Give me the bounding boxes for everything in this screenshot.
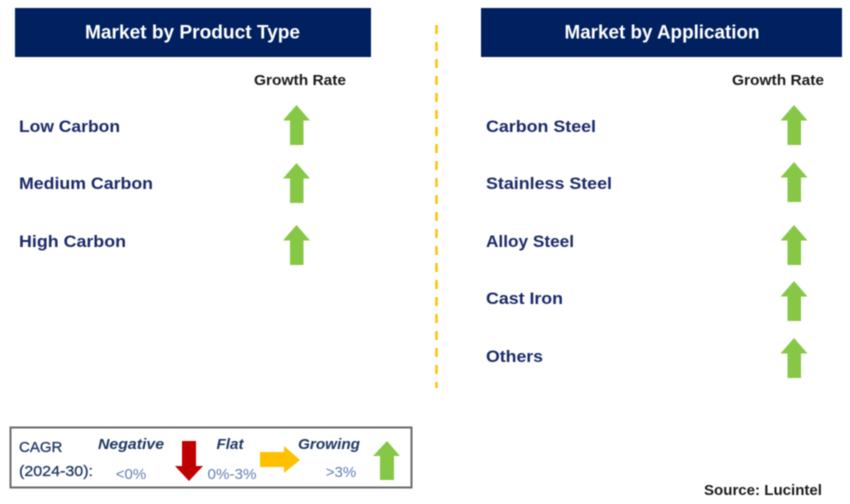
row: carbon steel: Carbon Steel bbox=[486, 117, 596, 136]
row: alloy steel bbox=[486, 225, 808, 265]
legend: growing: >3% bbox=[326, 464, 356, 481]
divider bbox=[435, 25, 438, 388]
row: high carbon: High Carbon bbox=[19, 232, 126, 251]
row: stainless steel bbox=[486, 162, 808, 202]
column label: growth rate: Growth Rate bbox=[732, 72, 824, 89]
row: medium carbon bbox=[19, 163, 310, 203]
legend: flat: Flat bbox=[216, 436, 245, 453]
row: cast iron bbox=[486, 281, 808, 321]
column label: growth rate: Growth Rate bbox=[254, 72, 346, 89]
row: medium carbon: Medium Carbon bbox=[19, 174, 153, 193]
row: others bbox=[486, 338, 808, 378]
legend: negative: Negative bbox=[98, 436, 164, 453]
heading: market by product type: Market by Product Type bbox=[85, 22, 300, 44]
row: cast iron: Cast Iron bbox=[486, 289, 563, 308]
panel: market by product type bbox=[15, 8, 371, 265]
legend: cagr bbox=[10, 428, 412, 488]
row: low carbon bbox=[19, 105, 310, 145]
legend: flat bbox=[208, 436, 300, 483]
heading: market by application bbox=[481, 8, 842, 57]
heading: market by application: Market by Application bbox=[564, 22, 760, 44]
legend: flat: 0%-3% bbox=[208, 466, 256, 483]
row: high carbon bbox=[19, 225, 310, 265]
legend label: cagr period: (2024-30): bbox=[19, 463, 93, 480]
row: alloy steel: Alloy Steel bbox=[486, 232, 574, 251]
legend: negative: <0% bbox=[116, 466, 146, 483]
panel: market by application bbox=[481, 8, 842, 378]
row: carbon steel bbox=[486, 105, 808, 145]
heading: market by product type bbox=[15, 8, 371, 57]
legend: growing bbox=[298, 436, 400, 481]
source note: Source: Lucintel bbox=[704, 482, 822, 499]
row: stainless steel: Stainless Steel bbox=[486, 174, 612, 193]
legend: growing: Growing bbox=[298, 436, 360, 453]
row: low carbon: Low Carbon bbox=[19, 117, 120, 136]
legend: negative bbox=[98, 436, 203, 483]
row: others: Others bbox=[486, 347, 543, 366]
legend label: cagr period: CAGR bbox=[19, 439, 63, 456]
